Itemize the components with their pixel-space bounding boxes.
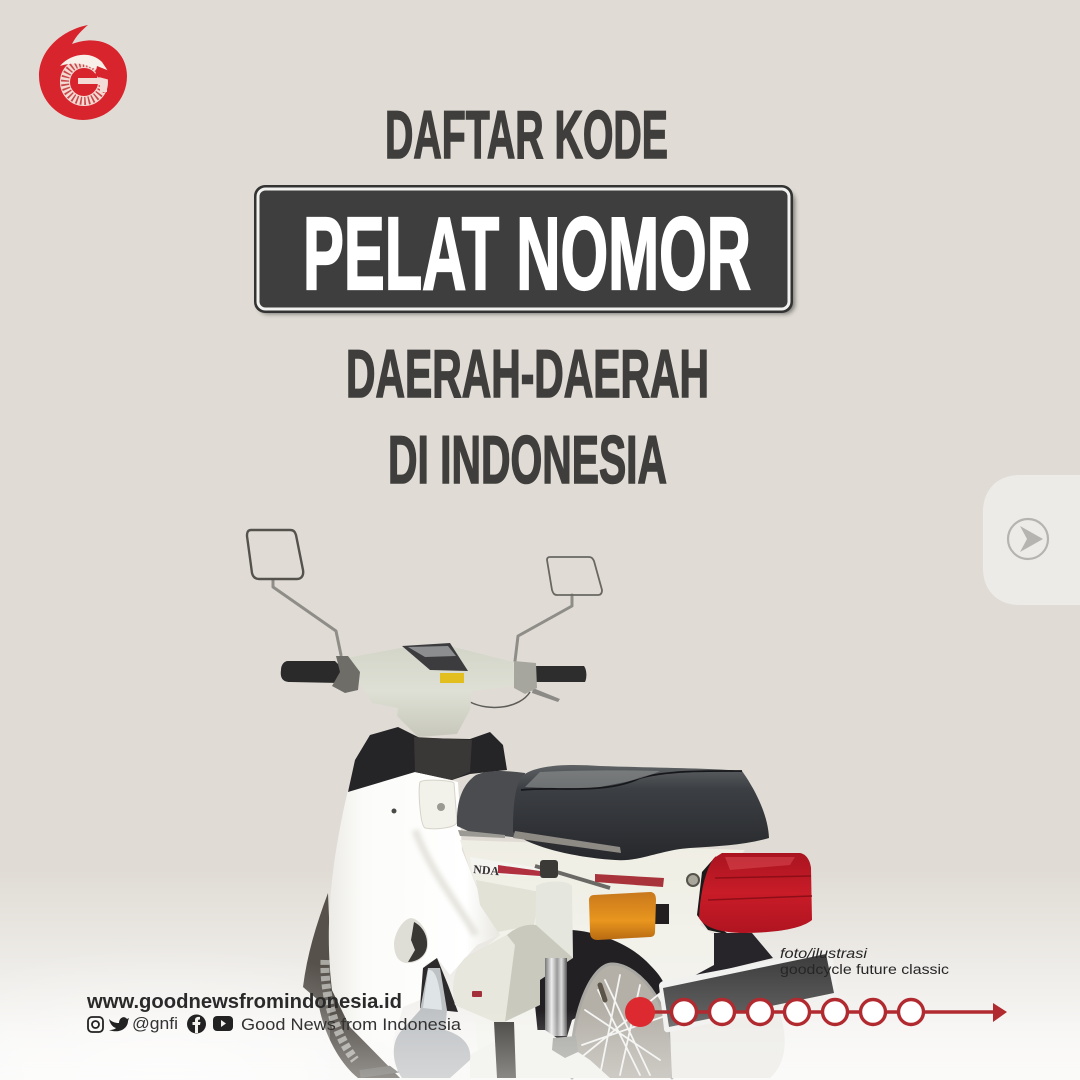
right mirror	[515, 557, 602, 661]
rear fender white	[670, 1008, 785, 1078]
shield center strip	[414, 737, 472, 780]
seat rail	[513, 831, 621, 853]
website url: www.goodnewsfromindonesia.id	[86, 990, 402, 1013]
handlebar assembly	[281, 643, 586, 737]
fender dark arch	[533, 930, 668, 1040]
lower white fairing	[470, 1030, 610, 1078]
icon: youtube	[213, 1016, 233, 1031]
left mirror	[247, 530, 341, 655]
front shield body	[329, 772, 500, 1072]
swing column	[535, 882, 573, 960]
bolt	[687, 874, 699, 886]
dark gap beside side panel	[420, 958, 458, 1012]
key box	[419, 780, 457, 829]
left corner glow	[0, 930, 330, 1080]
motorcycle illustration	[247, 530, 838, 1078]
turn signal	[589, 892, 669, 940]
honda stripe: NDA	[473, 862, 500, 878]
bottom white fade	[0, 870, 1080, 1080]
photo credit: goodcycle future classic	[780, 962, 949, 977]
panel badge	[472, 991, 482, 997]
mirror mount and brake cable	[535, 866, 610, 888]
exhaust spring	[360, 1068, 402, 1074]
honda stripe	[470, 857, 540, 878]
right clamp	[514, 661, 537, 694]
rear small red stripe	[595, 874, 664, 887]
black leg shield top	[348, 727, 507, 792]
inner recess	[476, 880, 540, 932]
plate text: PELAT NOMOR	[303, 196, 751, 311]
bottom overlay fade	[0, 1010, 1080, 1080]
keyhole	[437, 803, 445, 811]
next arrow tab	[983, 475, 1080, 605]
right grip	[536, 666, 586, 682]
black strap	[494, 1022, 516, 1078]
icon: next arrow	[1008, 519, 1048, 559]
tail light	[697, 853, 812, 935]
engine shade	[423, 970, 442, 1010]
spoke rim left	[325, 960, 355, 1060]
icon: facebook	[187, 1014, 206, 1034]
wheel spokes	[572, 964, 673, 1078]
brake cable	[470, 692, 530, 707]
timeline progress with arrow	[625, 997, 1007, 1027]
title: Daftar Kode: DAFTAR KODE	[385, 97, 668, 173]
seat	[457, 765, 769, 860]
title: Di Indonesia: DI INDONESIA	[388, 422, 667, 498]
yellow sticker	[440, 673, 464, 683]
body hole	[394, 918, 428, 963]
heading plate: Pelat Nomor	[254, 185, 795, 314]
chrome fork	[545, 958, 567, 1036]
left grip	[281, 661, 342, 683]
photo credit	[780, 946, 949, 977]
current step	[625, 997, 655, 1027]
side panel	[453, 925, 573, 1024]
fork bolt	[552, 1036, 578, 1058]
license plate	[659, 950, 838, 1032]
photo credit: foto/ilustrasi	[780, 946, 868, 961]
shield highlight	[415, 830, 476, 935]
left clamp	[332, 656, 360, 693]
handle: @gnfi	[132, 1015, 178, 1033]
icon: instagram	[88, 1017, 103, 1032]
icon: twitter	[109, 1017, 129, 1031]
title: Daerah-Daerah: DAERAH-DAERAH	[346, 336, 709, 412]
footer website and socials	[86, 990, 462, 1034]
engine	[394, 968, 470, 1078]
display	[402, 643, 468, 671]
clamp	[540, 860, 558, 878]
rear tire left	[303, 893, 400, 1078]
channel name: Good News from Indonesia	[241, 1015, 462, 1034]
upcoming steps	[672, 1000, 924, 1024]
headset body	[347, 646, 514, 737]
rear body	[460, 840, 745, 1078]
plate bracket	[690, 933, 773, 978]
logo: GNFI red six with garuda G	[39, 25, 127, 120]
screw	[392, 808, 396, 814]
lever	[532, 688, 560, 702]
